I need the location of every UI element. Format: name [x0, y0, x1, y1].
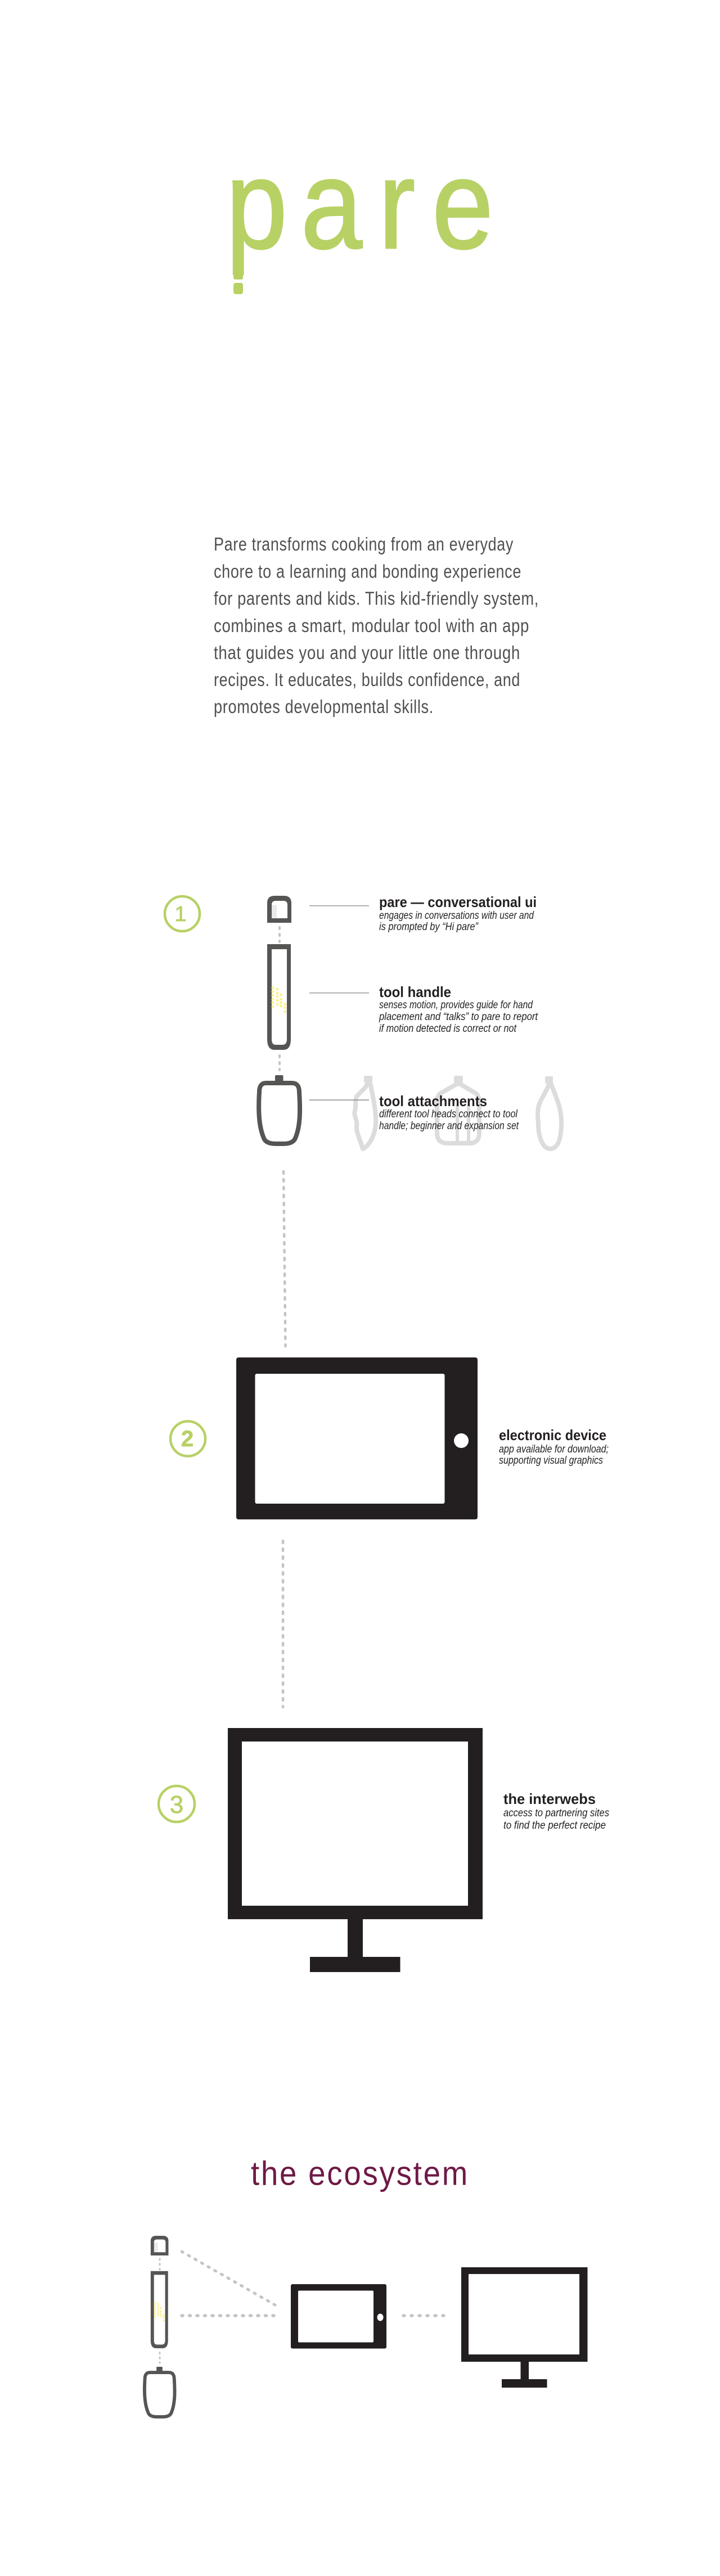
text block: introduction: chore to a learning and bonding experience — [214, 561, 521, 581]
icon: number 2 badge: 2 — [181, 1427, 194, 1451]
connector: cap to handle — [278, 927, 281, 942]
label: tool handle: tool handle — [379, 984, 451, 1000]
label: conversational ui: is prompted by “Hi pare” — [379, 921, 479, 933]
text block: introduction: promotes developmental skills. — [214, 696, 434, 717]
panel: ecosystem diagram — [145, 2236, 587, 2417]
icon: small modular tool — [145, 2236, 175, 2417]
icon: ghost attachment spatula — [437, 1076, 479, 1143]
text block: introduction: combines a smart, modular tool with an app — [214, 615, 529, 636]
icon: tablet — [236, 1357, 478, 1519]
label: tool attachments: different tool heads connect to tool — [379, 1108, 518, 1120]
label: conversational ui: engages in conversations with user and — [379, 910, 534, 922]
text block: introduction — [214, 534, 539, 717]
heading: the ecosystem: the ecosystem — [251, 2155, 469, 2192]
text block: introduction: for parents and kids. This kid-friendly system, — [214, 588, 539, 608]
icon: ghost attachment peeler — [354, 1076, 376, 1149]
icon: number 3 badge: 3 — [170, 1791, 183, 1819]
text block: introduction: recipes. It educates, builds confidence, and — [214, 669, 520, 690]
connector: tool to tablet — [284, 1171, 286, 1346]
connector: cap to tablet — [182, 2252, 275, 2305]
label: the interwebs: to find the perfect recipe — [503, 1820, 606, 1831]
leader line: conversational ui — [309, 905, 369, 906]
label: tool handle: if motion detected is correct or not — [379, 1023, 517, 1035]
label: the interwebs: the interwebs — [503, 1790, 596, 1807]
panel: step 1 modular tool — [165, 894, 561, 1149]
icon: tool attachment — [259, 1075, 300, 1144]
title: pare logo: pare — [226, 133, 493, 275]
icon: number 3 badge — [159, 1786, 195, 1822]
label: electronic device: electronic device — [499, 1427, 606, 1443]
connector: handle to attachment — [278, 1055, 281, 1070]
panel: step 3 the interwebs — [159, 1728, 609, 1972]
icon: small monitor — [461, 2267, 587, 2388]
label: the interwebs — [503, 1790, 609, 1831]
label: tool attachments: tool attachments — [379, 1093, 487, 1109]
label: conversational ui: pare — conversational ui — [379, 894, 537, 910]
text block: introduction: that guides you and your little one through — [214, 642, 520, 663]
icon: monitor — [228, 1728, 483, 1972]
icon: pare tool cap — [267, 896, 291, 923]
icon: number 1 badge: 1 — [174, 903, 187, 926]
label: tool handle — [379, 984, 538, 1035]
label: electronic device — [499, 1427, 609, 1467]
icon: number 1 badge — [165, 896, 200, 931]
icon: tool handle — [267, 944, 291, 1050]
leader line: tool handle — [309, 992, 369, 993]
label: tool handle: placement and “talks” to pare to report — [379, 1011, 538, 1023]
label: tool attachments — [379, 1093, 519, 1132]
icon: number 2 badge — [170, 1422, 205, 1456]
connector: handle to tablet — [182, 2314, 274, 2317]
label: tool attachments: handle; beginner and expansion set — [379, 1120, 519, 1132]
connector: tablet to monitor — [282, 1541, 284, 1707]
label: electronic device: app available for download; — [499, 1443, 609, 1455]
icon: ghost attachment knife — [538, 1076, 561, 1149]
text block: introduction: Pare transforms cooking from an everyday — [214, 534, 514, 554]
panel: step 2 electronic device — [170, 1357, 609, 1519]
label: the interwebs: access to partnering sites — [503, 1807, 609, 1819]
label: conversational ui — [379, 894, 537, 933]
connector: tablet to monitor — [403, 2314, 447, 2317]
label: tool handle: senses motion, provides guide for hand — [379, 999, 533, 1011]
icon: small tablet — [291, 2284, 386, 2348]
label: electronic device: supporting visual graphics — [499, 1455, 603, 1467]
